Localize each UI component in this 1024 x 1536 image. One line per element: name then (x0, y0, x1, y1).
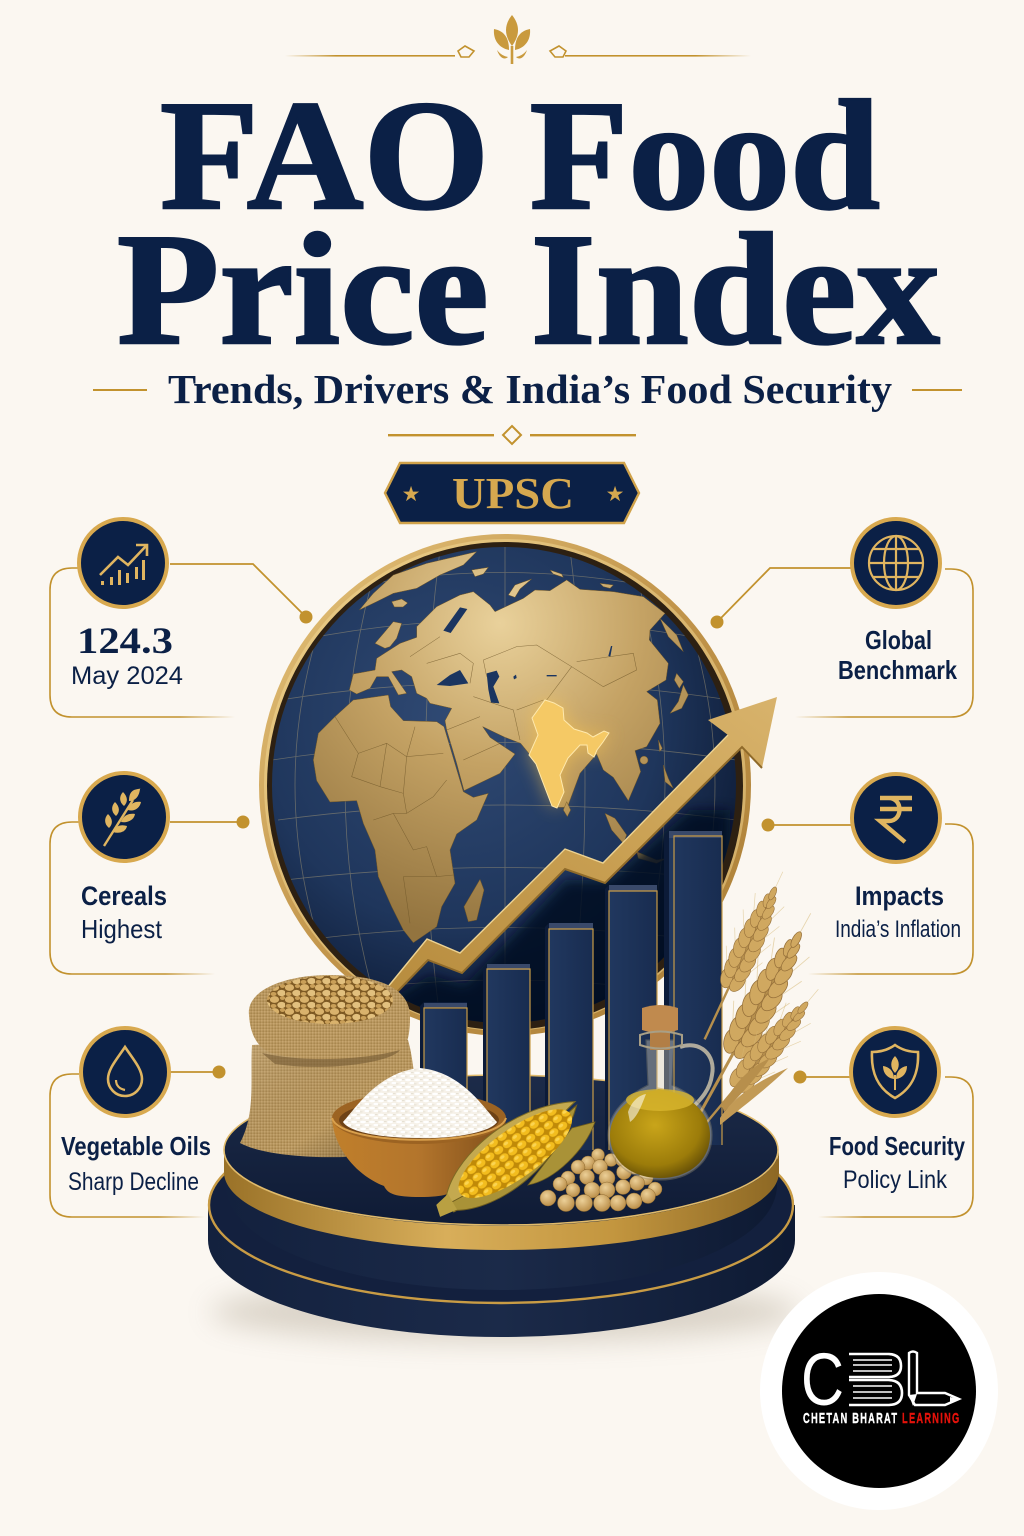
dark backdrop behind bars (399, 802, 734, 1022)
oil bottle (608, 1005, 713, 1180)
value text (71, 621, 183, 690)
logo icon: pencil (909, 1352, 959, 1406)
food security text (829, 1131, 965, 1194)
cereals text: Highest (81, 914, 163, 944)
uk (375, 622, 402, 648)
logo icon: stacked books (849, 1354, 902, 1405)
title: FAO Food (160, 68, 880, 242)
top ornament: leaf and rules (285, 15, 751, 64)
country borders (335, 637, 637, 923)
global benchmark text (838, 625, 957, 685)
icon: oil drop (81, 1028, 169, 1116)
logo: Chetan Bharat Learning (760, 1272, 998, 1510)
panel: vegetable oils (50, 1028, 226, 1217)
global benchmark text: Benchmark (838, 655, 957, 685)
icon: globe (852, 519, 940, 607)
food security text: Food Security (829, 1131, 965, 1161)
cereals text: Cereals (81, 881, 167, 911)
platform (208, 1075, 795, 1337)
UPSC badge (385, 463, 639, 523)
panel: food security (794, 1028, 973, 1217)
impacts text: India’s Inflation (835, 916, 961, 943)
continents (313, 552, 688, 943)
UPSC badge: ★ (402, 482, 420, 506)
India highlight (529, 700, 609, 808)
rice bowl (332, 1068, 506, 1197)
subtitle: Trends, Drivers & India’s Food Security (168, 366, 893, 412)
UPSC badge: ★ (606, 482, 624, 506)
vegetable oils text: Sharp Decline (68, 1168, 199, 1196)
icon: wheat ear (80, 773, 168, 861)
africa (313, 695, 488, 943)
growth arrow (387, 697, 777, 992)
platform shadow (210, 1282, 800, 1342)
icon: shield with wheat (851, 1028, 939, 1116)
panel: index value 124.3 (50, 519, 312, 717)
japan and east asia islands (660, 618, 688, 713)
cereals text (81, 881, 167, 944)
title (117, 68, 940, 378)
icon: rupee (852, 774, 940, 862)
value text: 124.3 (77, 621, 173, 662)
eurasia (349, 580, 668, 807)
globe grid lines (272, 547, 736, 1023)
vegetable oils text: Vegetable Oils (61, 1131, 211, 1161)
sri lanka (563, 802, 571, 817)
global benchmark text: Global (865, 625, 932, 655)
impacts text: Impacts (855, 881, 944, 911)
icon: rising chart (79, 519, 167, 607)
madagascar (464, 879, 484, 922)
logo letter C: C (801, 1338, 844, 1421)
panel: cereals (50, 773, 250, 974)
logo wordmark: CHETAN BHARAT LEARNING (803, 1410, 959, 1427)
wheat bundle (677, 863, 834, 1144)
impacts text (835, 881, 961, 943)
panel: global benchmark (710, 519, 973, 717)
title: Price Index (117, 200, 940, 378)
bar chart (420, 831, 722, 1150)
vegetable oils text (61, 1131, 211, 1196)
divider with diamond (388, 426, 636, 444)
greenland (359, 552, 477, 610)
grain sack (240, 975, 420, 1157)
south-east asia (605, 740, 673, 843)
globe (259, 534, 751, 1036)
food security text: Policy Link (843, 1166, 947, 1194)
corn cob (418, 1083, 596, 1234)
value text: May 2024 (71, 662, 183, 690)
UPSC badge: UPSC (452, 469, 574, 518)
inland seas (437, 607, 612, 703)
panel: impacts inflation (762, 774, 973, 974)
soybeans (540, 1148, 662, 1212)
